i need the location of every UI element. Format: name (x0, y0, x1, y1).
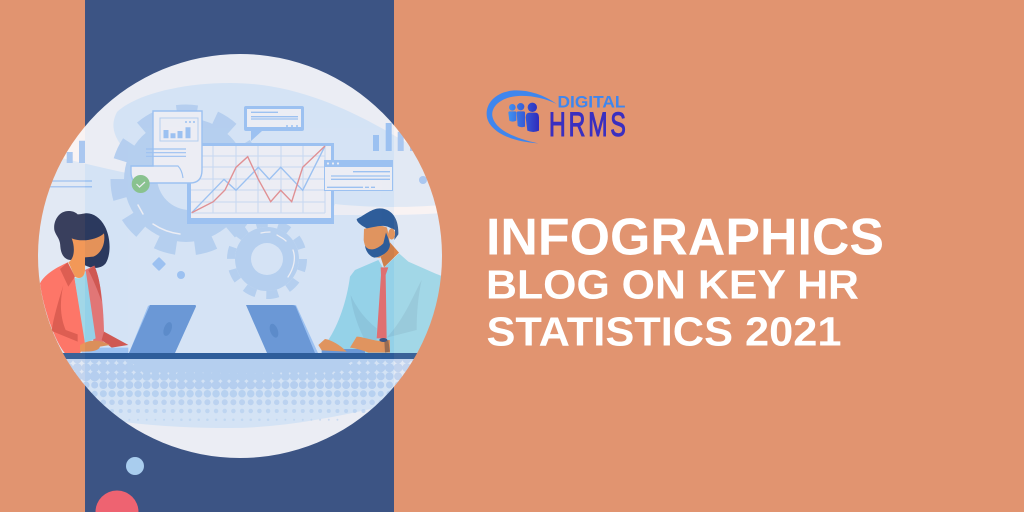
browser window (324, 160, 393, 190)
tie (377, 267, 388, 338)
left hand (318, 339, 347, 352)
left lines decoration (40, 181, 92, 187)
background blob (30, 83, 450, 428)
face (364, 226, 390, 258)
keyboard (322, 349, 365, 353)
line chart panel (187, 143, 334, 224)
hand (80, 341, 110, 352)
small gear (231, 223, 303, 295)
blue data line (192, 146, 325, 213)
red data line (192, 146, 325, 213)
laptop base (82, 348, 128, 353)
hair (357, 208, 398, 240)
man figure (318, 208, 443, 354)
diamond shape (152, 257, 166, 271)
jacket (40, 262, 85, 353)
jacket shading (52, 262, 78, 342)
right bar decoration (376, 123, 413, 151)
circular office illustration (30, 50, 450, 470)
table edge (30, 353, 450, 359)
navy vertical band (85, 0, 394, 512)
subheading line two: STATISTICS 2021 (486, 308, 842, 354)
left bar decoration (70, 141, 82, 163)
logo wordmark hrms: HRMS (549, 107, 626, 144)
logo wordmark digital: DIGITAL (558, 93, 626, 111)
big gear (118, 112, 254, 248)
woman figure (40, 211, 128, 353)
report document (131, 111, 202, 183)
decorative light blue dot (126, 457, 144, 475)
right dot (419, 176, 427, 184)
check badge (132, 175, 150, 193)
headline: INFOGRAPHICS (486, 208, 884, 266)
shirt (74, 270, 96, 343)
right laptop (246, 305, 318, 353)
logo (487, 90, 626, 144)
right hand (350, 337, 390, 353)
neck and face (68, 233, 104, 278)
watch (384, 340, 390, 353)
shirt shading (351, 280, 422, 340)
neck (380, 242, 399, 267)
ear (388, 228, 395, 240)
logo swoosh and people (487, 90, 557, 143)
subheading line one: BLOG ON KEY HR (486, 262, 859, 308)
small dot (177, 271, 185, 279)
decorative pink circle (96, 490, 138, 512)
hair (54, 211, 110, 268)
speech bubble (244, 106, 304, 141)
shirt (328, 253, 443, 353)
left laptop (129, 305, 196, 353)
beard (365, 232, 390, 258)
halftone table front (60, 359, 420, 420)
